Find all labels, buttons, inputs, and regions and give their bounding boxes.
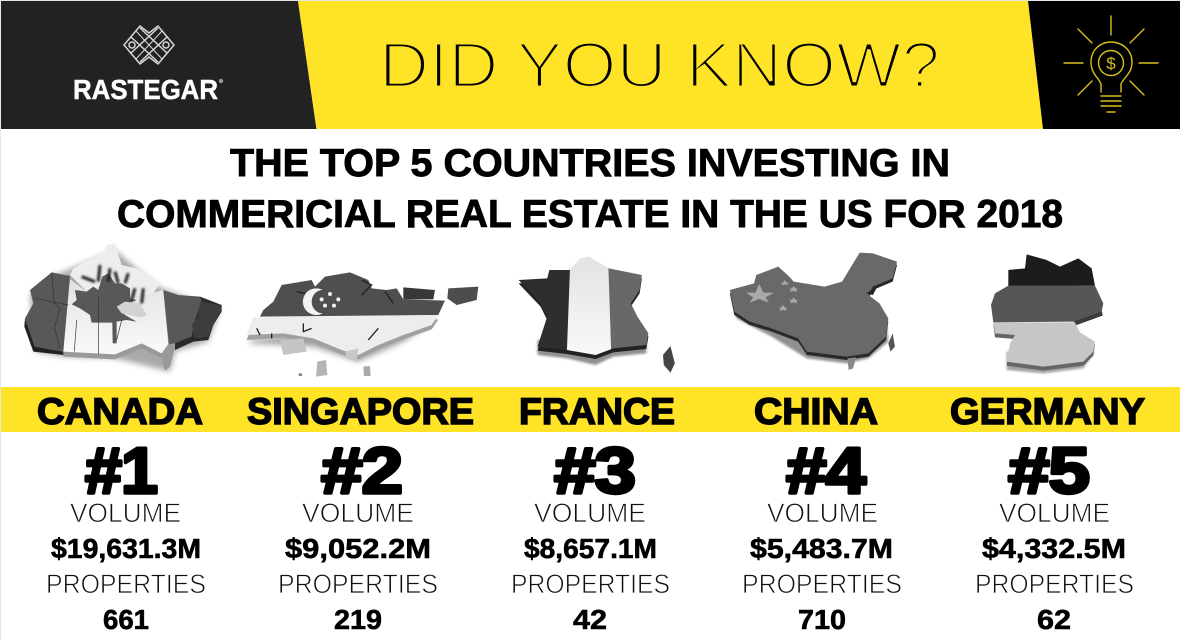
- column: France stats: 42: [573, 604, 607, 635]
- arctic shadow streaks: [82, 265, 143, 303]
- column: China stats: PROPERTIES: [742, 569, 902, 599]
- column: France stats: $8,657.1M: [524, 533, 657, 564]
- header: yellow title panel: [298, 1, 1043, 129]
- icon: light bulb with dollar sign: [1064, 16, 1158, 112]
- country names: CHINA: [754, 391, 878, 432]
- Corsica: [663, 346, 675, 373]
- column: China stats: [742, 434, 902, 635]
- column: Singapore stats: [278, 434, 438, 635]
- southern islets: [280, 338, 307, 355]
- column: Singapore stats: VOLUME: [302, 498, 414, 528]
- column: China stats: #4: [785, 434, 866, 507]
- flag stars: [746, 280, 798, 311]
- header band: [0, 0, 1180, 129]
- column: Canada stats: [46, 434, 206, 635]
- column: Germany stats: 62: [1037, 604, 1071, 635]
- arctic islands: [70, 243, 160, 297]
- map: Germany: [991, 254, 1103, 373]
- light stripe: [993, 322, 1095, 367]
- column: China stats: $5,483.7M: [750, 533, 893, 564]
- column: Canada stats: PROPERTIES: [46, 569, 206, 599]
- crescent and stars: [303, 288, 323, 315]
- column: Canada stats: #1: [84, 434, 158, 507]
- map: China: [730, 253, 897, 370]
- column: China stats: VOLUME: [767, 498, 878, 528]
- maple leaf: [72, 273, 137, 343]
- column: Germany stats: VOLUME: [999, 498, 1110, 528]
- west red stripe: [25, 272, 70, 352]
- column: France stats: VOLUME: [534, 498, 646, 528]
- country names: GERMANY: [950, 391, 1145, 432]
- country names: CANADA: [37, 391, 203, 432]
- side wall: [247, 319, 438, 359]
- column: Canada stats: $19,631.3M: [51, 533, 201, 564]
- heading: COMMERICIAL REAL ESTATE IN THE US FOR 2018: [117, 193, 1063, 236]
- light lower half: [247, 315, 438, 355]
- header: dark logo panel: [1, 1, 316, 129]
- coastline creeks: [257, 280, 393, 340]
- column: Canada stats: VOLUME: [70, 498, 181, 528]
- icon: light bulb with dollar sign: $: [1106, 54, 1116, 73]
- Atlantic islands: [192, 302, 222, 338]
- dark upper half: [260, 272, 445, 317]
- map: Singapore: [247, 272, 478, 377]
- column: Germany stats: #5: [1007, 434, 1090, 507]
- column: Singapore stats: 219: [334, 604, 382, 635]
- country names: [37, 391, 1145, 432]
- title: DID YOU KNOW?: [379, 29, 940, 101]
- logo: Rastegar: [73, 26, 223, 105]
- eastern block: [403, 287, 435, 299]
- column: France stats: PROPERTIES: [511, 569, 670, 599]
- map: France: [516, 253, 675, 373]
- Hudson Bay: [117, 302, 147, 317]
- column: Germany stats: PROPERTIES: [975, 569, 1134, 599]
- icon: endless knot: [124, 26, 174, 64]
- eastern island: [447, 287, 478, 305]
- column: Singapore stats: PROPERTIES: [278, 569, 438, 599]
- yellow country band: [1, 387, 1180, 432]
- white centre stripe: [63, 279, 168, 354]
- column: France stats: [511, 434, 670, 635]
- column: Germany stats: [975, 434, 1134, 635]
- header: black icon panel: [1028, 1, 1180, 129]
- grey stripe: [991, 286, 1103, 322]
- heading: [117, 142, 1063, 236]
- column: Canada stats: 661: [103, 604, 149, 635]
- east red stripe: [163, 290, 202, 344]
- column: Singapore stats: $9,052.2M: [285, 533, 431, 564]
- column: Germany stats: $4,332.5M: [982, 533, 1126, 564]
- column: China stats: 710: [798, 604, 846, 635]
- logo wordmark: RASTEGAR: [73, 74, 218, 105]
- black stripe: [1008, 254, 1095, 287]
- column: Singapore stats: #2: [320, 434, 403, 507]
- registered mark: [219, 79, 223, 83]
- heading: THE TOP 5 COUNTRIES INVESTING IN: [230, 142, 950, 185]
- side wall: [63, 290, 175, 371]
- column: France stats: #3: [553, 434, 636, 507]
- country names: SINGAPORE: [247, 391, 474, 432]
- map: Canada: [24, 243, 222, 372]
- country names: FRANCE: [519, 391, 675, 432]
